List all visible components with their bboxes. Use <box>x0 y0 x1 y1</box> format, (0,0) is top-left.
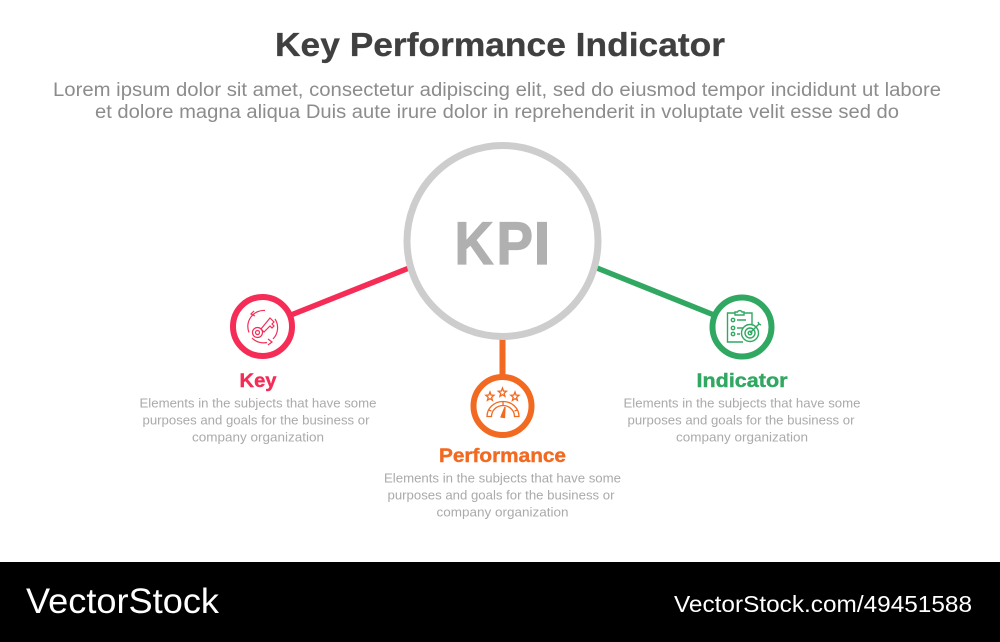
label: key: Key <box>240 371 277 392</box>
connector: performance <box>500 339 506 376</box>
description: indicator: purposes and goals for the business or <box>628 414 854 428</box>
label: indicator <box>624 371 861 444</box>
description: indicator: Elements in the subjects that have some <box>624 396 861 410</box>
title: Key Performance Indicator <box>275 26 725 63</box>
central KPI circle: I <box>534 210 550 277</box>
central KPI circle: P <box>496 210 533 277</box>
central KPI circle: K <box>454 210 494 277</box>
node: key <box>233 297 292 356</box>
description: performance: Elements in the subjects that have some <box>384 472 621 486</box>
label: performance: Performance <box>439 446 566 467</box>
connector: indicator <box>597 268 714 315</box>
footer watermark bar: VectorStock.com/49451588 <box>674 591 972 617</box>
description: performance: company organization <box>436 506 569 520</box>
label: performance <box>384 446 621 520</box>
icon: speedometer with stars <box>486 388 519 418</box>
icon: clipboard with target <box>728 311 761 342</box>
description: indicator <box>624 396 861 444</box>
footer watermark bar: VectorStock <box>26 582 220 621</box>
label: indicator: Indicator <box>696 371 788 392</box>
node: indicator <box>712 298 772 356</box>
subtitle paragraph: et dolore magna aliqua Duis aute irure dolor in reprehenderit in voluptate velit esse sed do <box>95 102 899 123</box>
footer watermark bar <box>0 562 1000 642</box>
connector: key <box>291 268 409 315</box>
subtitle paragraph: Lorem ipsum dolor sit amet, consectetur adipiscing elit, sed do eiusmod tempor incididunt ut labore <box>53 80 941 101</box>
label: key <box>140 371 377 444</box>
subtitle paragraph <box>53 80 941 123</box>
description: performance: purposes and goals for the business or <box>388 488 614 502</box>
description: key <box>140 396 377 444</box>
description: key: purposes and goals for the business or <box>142 414 370 428</box>
node: performance <box>474 377 532 435</box>
description: indicator: company organization <box>676 430 808 444</box>
description: performance <box>384 472 621 520</box>
central KPI circle <box>407 146 598 336</box>
description: key: company organization <box>192 430 324 444</box>
icon: key with rotating arrows <box>248 310 278 345</box>
description: key: Elements in the subjects that have some <box>140 396 377 410</box>
